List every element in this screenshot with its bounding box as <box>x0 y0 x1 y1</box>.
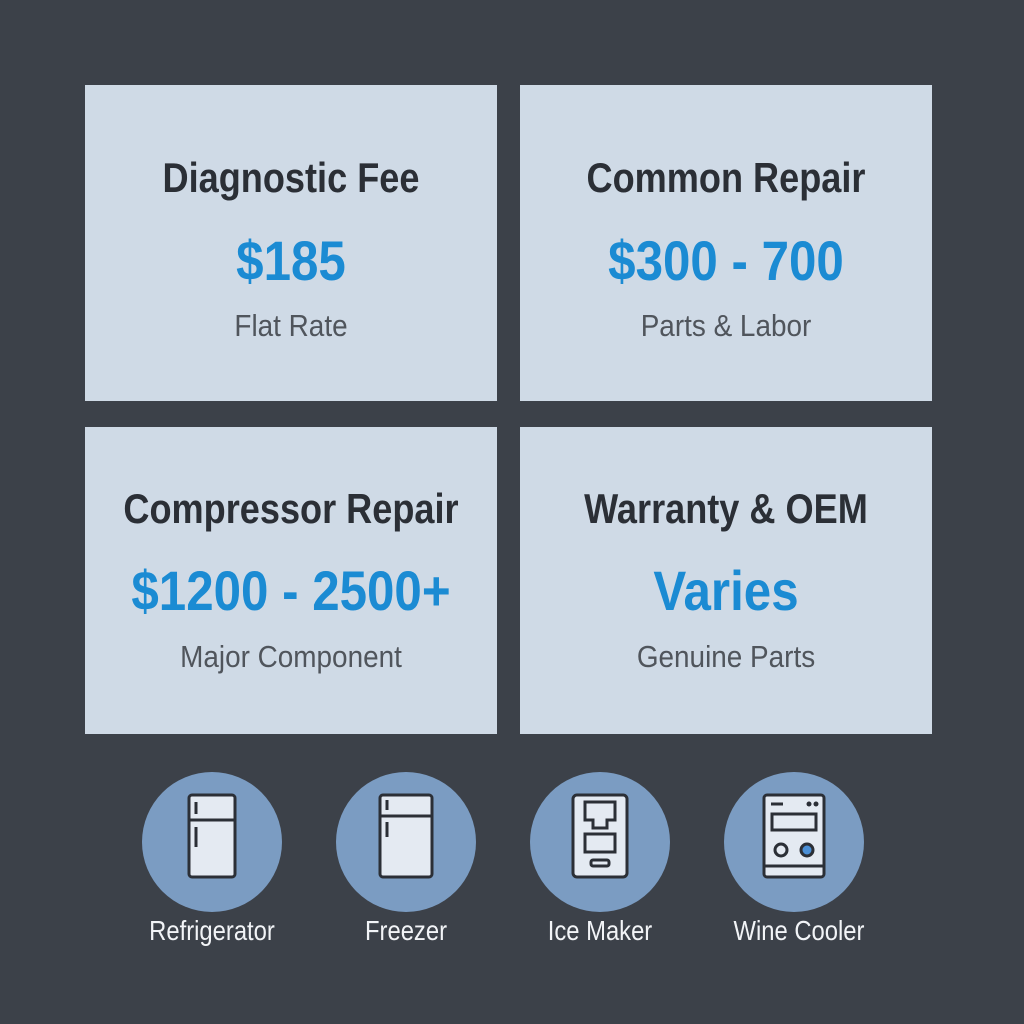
heading: Warranty & OEM <box>584 485 868 532</box>
heading: Common Repair <box>587 154 865 201</box>
panel: compressor repair <box>85 427 497 734</box>
label: wine cooler: Wine Cooler <box>734 915 864 946</box>
price: $185 <box>236 229 346 292</box>
heading: Compressor Repair <box>123 485 459 532</box>
subtitle: Parts & Labor <box>641 308 811 343</box>
icon: freezer <box>336 772 476 912</box>
subtitle: Flat Rate <box>234 308 348 343</box>
panel: diagnostic fee <box>85 85 497 401</box>
label: ice maker: Ice Maker <box>548 915 652 946</box>
label: freezer: Freezer <box>365 915 447 946</box>
icon: ice maker <box>530 772 670 912</box>
price: $300 - 700 <box>608 229 844 292</box>
price: Varies <box>653 559 799 622</box>
panel: common repair <box>520 85 932 401</box>
price: $1200 - 2500+ <box>131 559 451 622</box>
subtitle: Major Component <box>180 639 402 674</box>
subtitle: Genuine Parts <box>637 639 815 674</box>
label: refrigerator: Refrigerator <box>149 915 275 946</box>
heading: Diagnostic Fee <box>163 154 419 201</box>
icon: wine cooler <box>724 772 864 912</box>
panel: warranty <box>520 427 932 734</box>
icon: refrigerator <box>142 772 282 912</box>
